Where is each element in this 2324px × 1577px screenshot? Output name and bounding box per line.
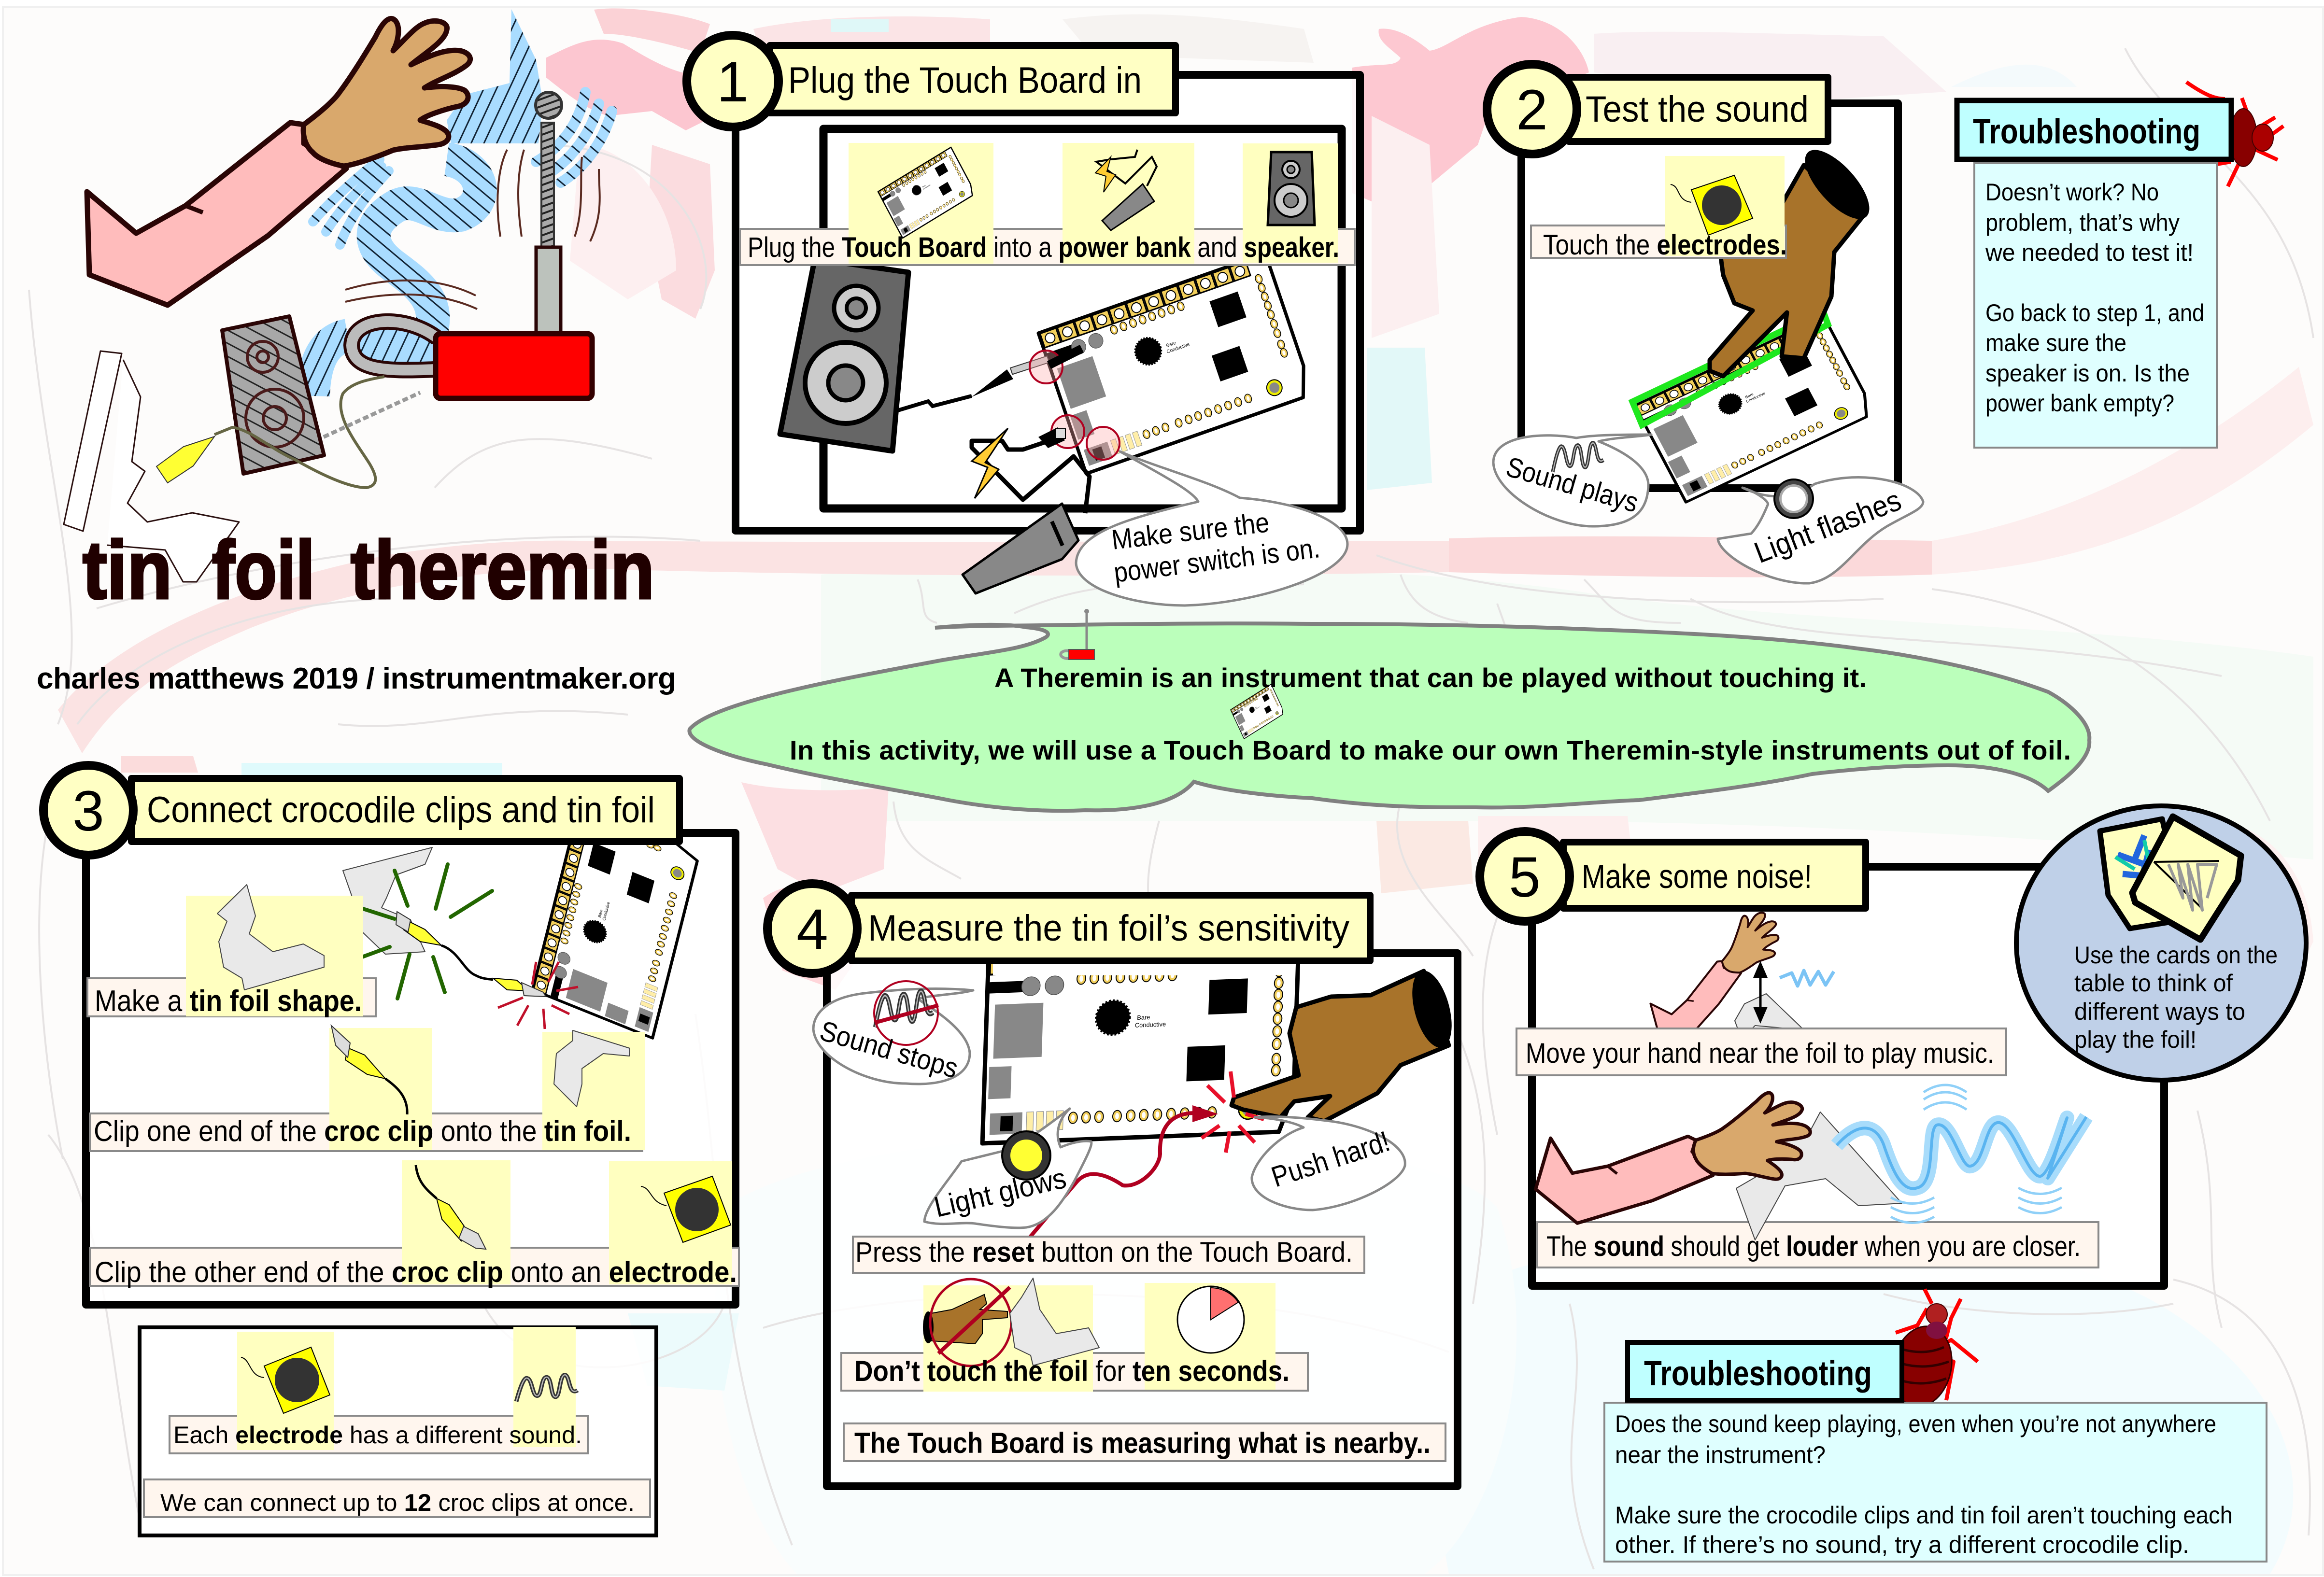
- usb cable: [972, 415, 1090, 513]
- heading: step 5: 5: [1509, 845, 1541, 909]
- touch board: [982, 943, 1299, 1143]
- panel: step 5: [1516, 867, 2164, 1286]
- foil: [1736, 1112, 1902, 1240]
- red sparks: [1202, 1071, 1264, 1153]
- panel: step 1: [736, 75, 1360, 605]
- icon: mini touch board: [1231, 684, 1285, 739]
- heading: step 4: Measure the tin foil’s sensitivity: [868, 908, 1349, 949]
- callout: green intro bubble: In this activity, we will use a Touch Board to make our own Theremin-style instruments out of foil.: [790, 735, 2071, 765]
- speaker: [780, 259, 908, 451]
- text block: near the instrument?: [1615, 1441, 1826, 1468]
- heading: step 3: 3: [72, 779, 104, 843]
- callout: [1076, 451, 1347, 605]
- text block: play the foil!: [2074, 1026, 2196, 1053]
- heading: step 2: 2: [1516, 78, 1548, 142]
- callout: green intro bubble: [689, 609, 2089, 811]
- double arrow: [1753, 961, 1768, 1024]
- crocodile clip wire: [214, 377, 384, 488]
- heading: step 3: Connect crocodile clips and tin foil: [147, 789, 655, 831]
- speaker: [222, 316, 324, 474]
- panel: troubleshooting bottom: Troubleshooting: [1644, 1354, 1872, 1393]
- callout: sound plays: Sound plays: [1502, 451, 1642, 519]
- green highlight: [1632, 311, 1828, 425]
- heading: step 1: 1: [717, 50, 749, 114]
- heading: step 2: Test the sound: [1586, 89, 1809, 130]
- pointing hand: [1710, 140, 1880, 376]
- text block: [2074, 942, 2278, 1053]
- callout: cards circle: [2016, 806, 2306, 1080]
- caption: make a tin foil shape: Make a tin foil shape.: [95, 985, 362, 1018]
- text block: [1985, 179, 2204, 417]
- callout: light glows: Light glows: [931, 1162, 1069, 1224]
- caption: each electrode: [170, 1327, 588, 1453]
- touch board: [1038, 253, 1313, 474]
- heading: step 5: Make some noise!: [1582, 858, 1812, 895]
- icon: bug: [1885, 1289, 1978, 1412]
- panel: step 3: [86, 804, 739, 1305]
- foil shape behind: [343, 847, 432, 954]
- caption: clip the other end: Clip the other end of the croc clip onto an electrode.: [95, 1256, 737, 1288]
- icon: cards: [2100, 817, 2241, 940]
- touch board: [1635, 316, 1875, 502]
- caption: make a tin foil shape: [87, 885, 376, 1018]
- caption: twelve clips: We can connect up to 12 croc clips at once.: [160, 1489, 635, 1516]
- clips: [396, 912, 546, 997]
- caption: plug in with icons: Plug the Touch Board into a power bank and speaker.: [748, 232, 1339, 263]
- text block: we needed to test it!: [1985, 239, 2194, 266]
- callout: green intro bubble: A Theremin is an instrument that can be played without touching it.: [994, 662, 1867, 693]
- callout: sound stops: [813, 981, 973, 1084]
- sound waves: [313, 9, 612, 396]
- small foil: [1735, 994, 1802, 1039]
- icon: bug: [2181, 82, 2283, 186]
- heading: step 5: [1480, 831, 1866, 921]
- clip wire: [441, 945, 493, 980]
- text block: different ways to: [2074, 998, 2245, 1025]
- small arm: [1636, 909, 1797, 1044]
- caption: louder when closer: [1537, 1112, 2098, 1267]
- panel: troubleshooting bottom: [1604, 1289, 2267, 1562]
- icon: electrode: [1671, 175, 1753, 235]
- red arrow: [1026, 1105, 1218, 1241]
- power bank: [963, 504, 1078, 593]
- red sparks: [498, 962, 578, 1029]
- caption: move your hand: [1516, 1028, 2006, 1075]
- title: tin: [83, 524, 172, 616]
- callout: Make sure the: [1110, 507, 1271, 556]
- foil: [64, 351, 239, 582]
- panel: troubleshooting top: [1957, 82, 2283, 448]
- title: theremin: [351, 524, 654, 616]
- icon: power bank: [1095, 150, 1157, 230]
- text block: [1615, 1410, 2233, 1558]
- heading: step 1: Plug the Touch Board in: [788, 60, 1142, 101]
- caption: do not touch: [841, 1278, 1308, 1392]
- panel: step 2: [1493, 103, 1923, 583]
- caption: clip one end: Clip one end of the croc clip onto the tin foil.: [94, 1115, 631, 1147]
- lightning: [972, 428, 1008, 498]
- panel: troubleshooting top: Troubleshooting: [1973, 113, 2200, 151]
- callout: light flashes: Light flashes: [1750, 483, 1906, 570]
- icon: no touching hand: [923, 1279, 1011, 1366]
- arm and hand: [87, 18, 470, 305]
- heading: step 1: [687, 35, 1176, 127]
- caption: plug in with icons: [740, 143, 1355, 265]
- text block: problem, that’s why: [1985, 209, 2180, 236]
- pointing hand: [1232, 966, 1459, 1121]
- callout: push hard: [1252, 1117, 1405, 1210]
- text block: power bank empty?: [1985, 390, 2174, 417]
- red theremin box: [436, 334, 592, 398]
- title: [83, 524, 654, 616]
- touch board: [533, 804, 699, 1038]
- text block: make sure the: [1985, 329, 2126, 356]
- panel: step 4: [813, 943, 1459, 1486]
- heading: step 4: [767, 884, 1370, 973]
- caption: measuring: The Touch Board is measuring what is nearby..: [854, 1427, 1431, 1459]
- caption: twelve clips: [144, 1479, 650, 1517]
- caption: touch the electrodes: [1531, 156, 1787, 261]
- credit line: charles matthews 2019 / instrumentmaker.org: [37, 662, 676, 695]
- heading: step 3: [43, 765, 680, 855]
- small sound wave: [1780, 971, 1834, 986]
- caption: move your hand: Move your hand near the foil to play music.: [1526, 1038, 1994, 1069]
- text block: table to think of: [2074, 970, 2233, 997]
- text block: Does the sound keep playing, even when you’re not anywhere: [1615, 1410, 2216, 1437]
- caption: clip the other end: [90, 1160, 739, 1288]
- text block: speaker is on. Is the: [1985, 360, 2190, 387]
- caption: clip one end: [90, 1026, 645, 1151]
- text block: Doesn’t work? No: [1985, 179, 2159, 206]
- callout: sound stops: Sound stops: [816, 1015, 962, 1084]
- audio jack: [898, 349, 1082, 410]
- text block: other. If there’s no sound, try a different crocodile clip.: [1615, 1531, 2189, 1558]
- text block: Go back to step 1, and: [1985, 299, 2204, 326]
- icon: speaker: [1268, 152, 1315, 225]
- caption: louder when closer: The sound should get louder when you are closer.: [1546, 1231, 2081, 1262]
- large arm: [1528, 1033, 1818, 1283]
- heading: step 2: [1487, 64, 1828, 154]
- title: foil: [212, 524, 315, 616]
- caption: each electrode: Each electrode has a different sound.: [173, 1422, 582, 1449]
- large sound wave: [1837, 1085, 2086, 1223]
- text block: Make sure the crocodile clips and tin foil aren’t touching each: [1615, 1502, 2233, 1529]
- icon: mini theremin: [1061, 609, 1094, 660]
- volume loop: [352, 322, 437, 370]
- callout: light glows: [924, 1109, 1091, 1228]
- panel: electrode note: [140, 1327, 656, 1535]
- caption: touch the electrodes: Touch the electrodes.: [1543, 229, 1787, 261]
- callout: power switch is on.: [1112, 532, 1321, 589]
- vibration lines: [345, 150, 600, 309]
- caption: do not touch: Don’t touch the foil for ten seconds.: [854, 1355, 1290, 1387]
- title illustration: hand and theremin: [64, 9, 612, 582]
- icon: clock: [1177, 1286, 1244, 1353]
- caption: press reset: Press the reset button on the Touch Board.: [855, 1237, 1353, 1268]
- callout: push hard: Push hard!: [1267, 1125, 1394, 1193]
- green sparks: [352, 864, 492, 999]
- antenna: [536, 92, 562, 335]
- power switch ring: [1087, 427, 1119, 460]
- icon: mini touch board: [878, 147, 976, 238]
- heading: step 4: 4: [796, 898, 828, 961]
- text block: Use the cards on the: [2074, 942, 2278, 969]
